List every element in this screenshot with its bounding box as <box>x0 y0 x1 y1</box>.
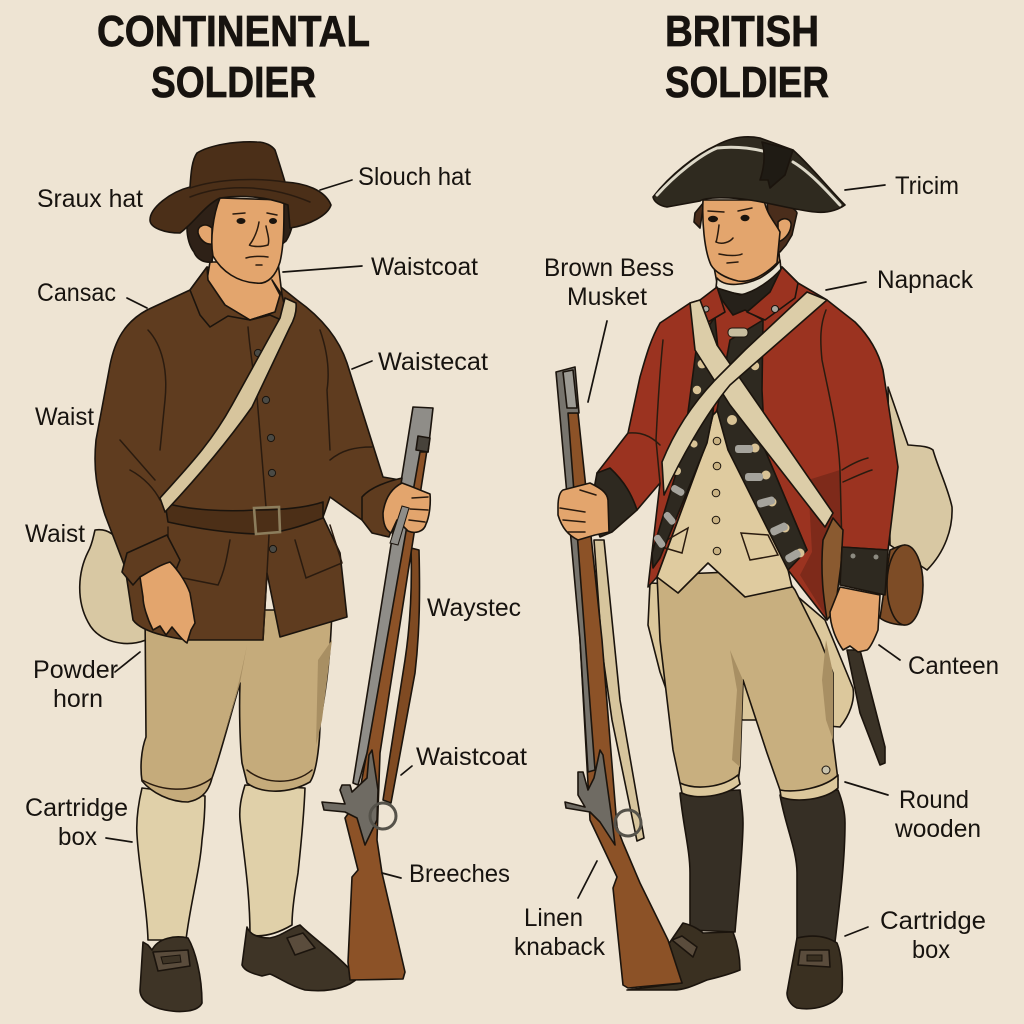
pocket flaps <box>168 525 342 585</box>
shoe right <box>242 925 358 991</box>
label: Napnack: Napnack <box>877 266 973 294</box>
label: Breeches: Breeches <box>409 860 510 888</box>
coat tail <box>648 583 853 727</box>
musket barrel <box>556 367 595 772</box>
left hand <box>558 483 609 540</box>
buttons <box>254 349 277 553</box>
title: British Soldier: BRITISH <box>665 7 819 56</box>
shoe right <box>787 936 842 1009</box>
left cuff <box>122 535 180 585</box>
icon: round wooden canteen <box>880 545 923 625</box>
black cravat <box>717 268 782 320</box>
musket flintlock <box>565 750 615 845</box>
scabbard <box>847 650 885 765</box>
waistcoat buttons and pockets <box>665 437 778 560</box>
musket sling <box>594 540 644 841</box>
neck <box>207 262 282 320</box>
icon: knapsack <box>888 387 952 570</box>
lapel left <box>652 317 718 568</box>
label: Brown Bess Musket: Brown Bess <box>544 254 674 282</box>
musket stock <box>567 413 682 988</box>
face <box>212 198 284 283</box>
label: Powder horn: Powder <box>33 656 118 684</box>
collar left <box>190 267 250 327</box>
stocking right <box>240 785 305 936</box>
hair <box>694 200 797 252</box>
label: Round wooden: wooden <box>894 815 981 843</box>
title: British Soldier <box>665 7 829 107</box>
belt <box>165 502 323 534</box>
figure: Continental soldier <box>80 142 433 1012</box>
musket flintlock <box>322 750 378 845</box>
label: Sraux hat: Sraux hat <box>37 185 143 213</box>
barrel over hand <box>390 506 409 545</box>
label: Waistecat: Waistecat <box>378 348 488 376</box>
right hand <box>383 483 430 533</box>
label: Linen knaback: Linen <box>524 904 583 932</box>
label: Cansac: Cansac <box>37 279 116 307</box>
boot left <box>680 790 743 932</box>
title: Continental Soldier: SOLDIER <box>151 58 316 107</box>
brown frog pouch <box>822 518 843 620</box>
label: Linen knaback: knaback <box>514 933 605 961</box>
label: Brown Bess Musket: Musket <box>567 283 647 311</box>
label: Waist (lower): Waist <box>25 520 85 548</box>
ear <box>778 219 791 242</box>
knee bands <box>680 775 838 800</box>
label: Powder horn <box>33 652 140 713</box>
collar right <box>250 280 288 323</box>
white stock collar <box>716 260 781 295</box>
left hand <box>140 562 195 643</box>
musket barrel <box>353 407 433 785</box>
label: Waistcoat (lower): Waistcoat <box>416 743 527 771</box>
label: Cartridge box (right): box <box>912 936 950 964</box>
label: Cartridge box (right) <box>845 907 986 964</box>
label: Cartridge box (left) <box>25 794 132 851</box>
label: Waystec: Waystec <box>427 594 521 622</box>
musket sling <box>383 548 420 803</box>
label: Linen knaback <box>514 861 605 961</box>
right hand <box>830 587 880 652</box>
label: Tricim: Tricim <box>895 172 959 200</box>
label: Round wooden <box>845 782 981 843</box>
coat shading <box>800 470 842 618</box>
crossbelt: shoulder to hip <box>690 300 833 527</box>
musket stock <box>345 450 427 980</box>
label: Tricim <box>845 172 959 200</box>
belt buckle <box>254 507 280 534</box>
face <box>703 200 780 281</box>
label: Canteen: Canteen <box>908 652 999 680</box>
title: British Soldier: SOLDIER <box>665 58 829 107</box>
red collar right <box>747 267 798 320</box>
neck <box>713 240 780 295</box>
label: Brown Bess Musket <box>544 254 674 402</box>
hat ribbon fold <box>760 142 793 188</box>
label: Waistcoat (upper): Waistcoat <box>371 253 478 281</box>
title: Continental Soldier <box>97 7 370 107</box>
breeches <box>141 610 332 802</box>
crossbelt: shoulder to opposite hip <box>662 292 827 495</box>
lapel buttons <box>653 360 804 563</box>
hat white trim <box>657 147 840 205</box>
shoulder strap <box>160 298 296 512</box>
tricorn hat <box>653 137 845 212</box>
title: Continental Soldier: CONTINENTAL <box>97 7 370 56</box>
left cuff <box>590 468 637 537</box>
ear <box>198 225 212 244</box>
label: Slouch hat: Slouch hat <box>358 163 471 191</box>
coat <box>95 267 400 640</box>
lapel right <box>717 320 807 570</box>
waistcoat <box>657 410 792 597</box>
shoe left <box>140 937 202 1012</box>
figure: British soldier <box>556 137 952 1009</box>
placket and creases <box>120 327 372 640</box>
red collar left <box>700 287 725 325</box>
sleeve creases <box>628 310 872 547</box>
hair <box>187 198 293 262</box>
label: Waistcoat (upper) <box>283 253 478 281</box>
right cuff <box>362 478 402 537</box>
breeches <box>657 570 838 799</box>
icon: linen haversack <box>80 530 146 643</box>
boot right <box>780 790 845 942</box>
label: Powder horn: horn <box>53 685 103 713</box>
label: Cartridge box (left): box <box>58 823 97 851</box>
label: Waist (upper): Waist <box>35 403 94 431</box>
label: Cartridge box (right): Cartridge <box>880 907 986 935</box>
label: Napnack <box>826 266 973 294</box>
label: Cartridge box (left): Cartridge <box>25 794 128 822</box>
label: Round wooden: Round <box>899 786 969 814</box>
right cuff <box>840 547 888 595</box>
shoe left <box>627 923 740 990</box>
slouch hat <box>150 142 331 233</box>
label: Canteen <box>879 645 999 680</box>
coat <box>597 267 898 620</box>
stocking left <box>137 788 205 940</box>
